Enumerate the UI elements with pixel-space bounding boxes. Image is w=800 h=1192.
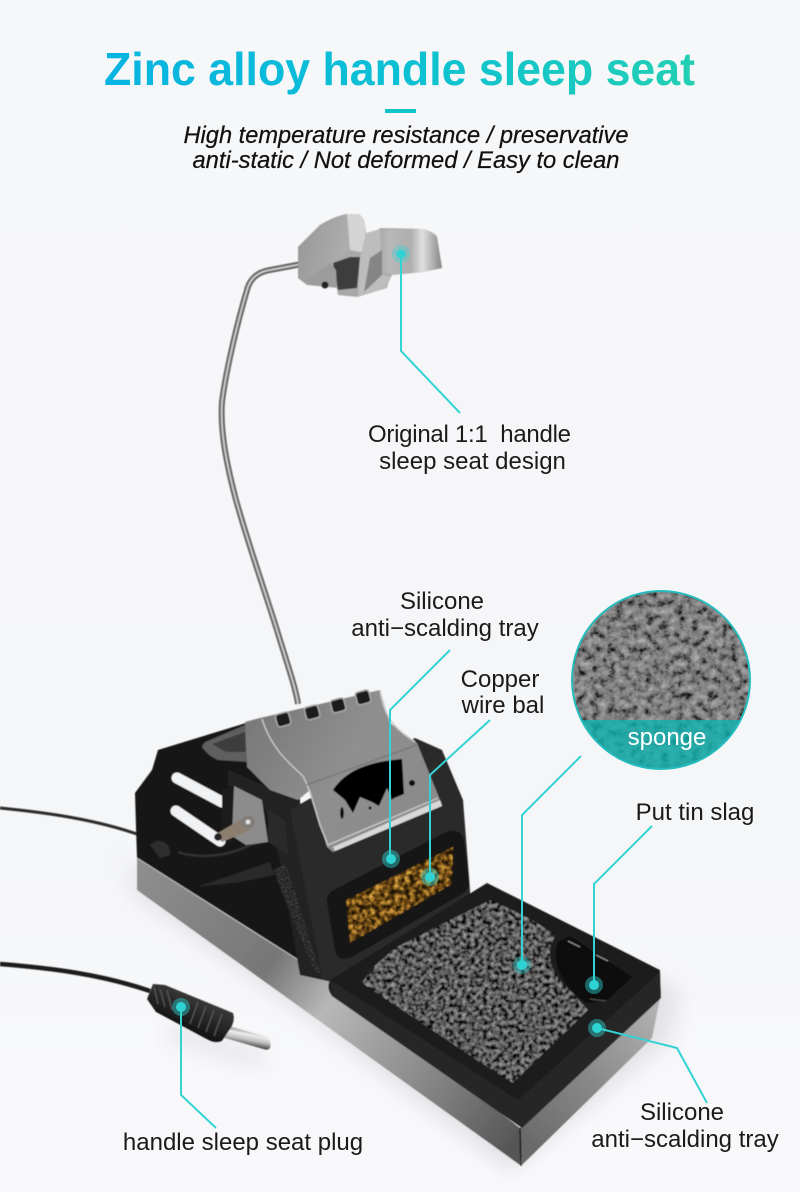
back frame xyxy=(135,723,325,985)
brass wool xyxy=(345,846,454,944)
subtitle: High temperature resistance / preservative xyxy=(184,122,628,149)
right base side xyxy=(520,998,660,1165)
head right lobe xyxy=(378,229,442,275)
black arch arm xyxy=(228,770,330,980)
label: silicone tray bottom: Silicone xyxy=(640,1099,724,1126)
label: copper wire ball: Copper xyxy=(461,666,539,693)
metal holder plate xyxy=(245,689,442,852)
sponge tray xyxy=(328,883,661,1128)
frame slots xyxy=(176,778,222,841)
ground shadows xyxy=(125,860,680,1172)
window frame xyxy=(327,831,469,959)
callout lines and dots xyxy=(172,245,707,1128)
product: soldering handle stand xyxy=(0,214,680,1172)
plate top slots xyxy=(275,689,372,728)
title: Zinc alloy handle sleep seat xyxy=(104,43,695,95)
front body panel xyxy=(290,738,470,985)
stand wire xyxy=(222,264,302,704)
inset label: sponge xyxy=(628,724,706,751)
label: silicone tray bottom xyxy=(591,1099,779,1153)
base side strip xyxy=(137,858,520,1165)
label: handle design: Original 1:1 handle xyxy=(368,421,571,448)
sponge xyxy=(362,900,588,1084)
plug xyxy=(147,984,271,1050)
head left face xyxy=(298,214,350,282)
label: silicone tray top: Silicone xyxy=(400,588,484,615)
head bright strip xyxy=(347,214,366,253)
label: put tin slag: Put tin slag xyxy=(636,799,754,826)
label: copper wire ball xyxy=(461,666,544,719)
handle rest head xyxy=(298,214,442,297)
label: silicone tray bottom: anti−scalding tray xyxy=(591,1126,779,1153)
plug cable xyxy=(0,964,150,991)
label: plug: handle sleep seat plug xyxy=(123,1129,363,1156)
subtitle: anti-static / Not deformed / Easy to clean xyxy=(192,147,620,174)
subtitle xyxy=(184,122,628,174)
title accent bar xyxy=(385,109,416,113)
inset: sponge close-up xyxy=(570,590,752,772)
label: silicone tray top: anti−scalding tray xyxy=(351,615,539,642)
label: handle design xyxy=(368,421,571,475)
head neck xyxy=(358,229,390,296)
label: silicone tray top xyxy=(351,588,539,642)
tray ledge behind plate xyxy=(202,725,248,762)
cable: power cord xyxy=(0,808,137,834)
label: copper wire ball: wire bal xyxy=(461,692,544,719)
tin slag cup xyxy=(556,936,632,1003)
head opening xyxy=(333,257,360,290)
textured side block xyxy=(274,865,320,972)
jack mount xyxy=(214,786,288,855)
label: handle design: sleep seat design xyxy=(379,448,566,475)
plate opening xyxy=(333,759,404,813)
inner floor xyxy=(197,862,274,887)
